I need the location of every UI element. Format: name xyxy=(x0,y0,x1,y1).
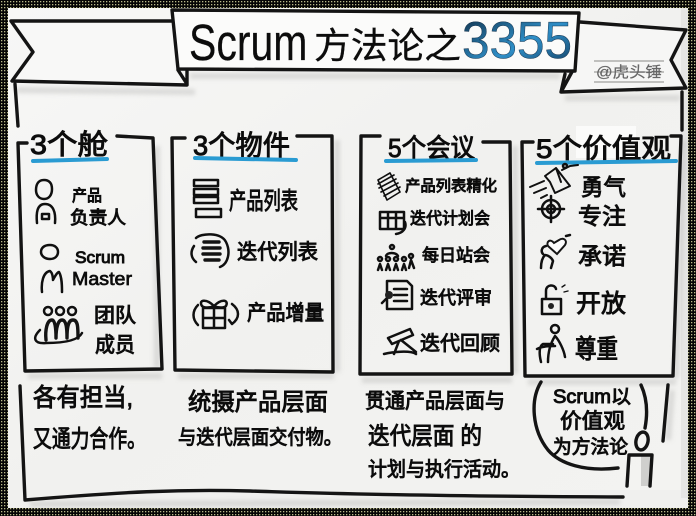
caption: roles: 又通力合作。 xyxy=(33,426,146,453)
event: sprint review: 迭代评审 xyxy=(420,288,492,308)
artifact: product backlog: 产品列表 xyxy=(229,188,298,215)
caption: artifacts: 统摄产品层面 xyxy=(188,389,328,416)
heading: 3个物件 xyxy=(193,130,290,161)
caption: artifacts xyxy=(178,389,342,449)
role: scrum master: Master xyxy=(72,269,132,289)
event: sprint review xyxy=(382,281,492,309)
event: backlog refinement: 产品列表精化 xyxy=(405,177,497,195)
value: openness: 开放 xyxy=(576,290,626,318)
heading: 5个价值观 xyxy=(536,134,671,164)
panel: 3 roles xyxy=(18,129,162,371)
heading: 5个会议 xyxy=(388,133,475,163)
value: commitment xyxy=(541,235,626,269)
event: daily scrum: 每日站会 xyxy=(422,246,490,265)
bottom frame xyxy=(20,385,668,500)
heading: 3个舱 xyxy=(30,129,108,160)
title number: 3355 xyxy=(462,12,572,70)
artifact: sprint backlog xyxy=(192,234,318,267)
callout: Scrum values speech bubble xyxy=(534,382,652,486)
role: product owner: 负责人 xyxy=(70,208,126,228)
event: sprint planning: 迭代计划会 xyxy=(410,209,490,228)
title banner: 方法论之 xyxy=(314,25,461,66)
caption: events: 迭代层面 的 xyxy=(368,423,482,450)
icon: speaker xyxy=(627,431,652,486)
side rules xyxy=(15,84,682,130)
callout: Scrum values speech bubble: 为方法论 xyxy=(553,436,628,458)
value: commitment: 承诺 xyxy=(578,243,626,269)
caption: roles: 各有担当, xyxy=(33,384,133,412)
right ribbon xyxy=(561,22,686,92)
value: openness xyxy=(542,285,626,318)
value: courage xyxy=(530,164,626,200)
artifact: product backlog xyxy=(194,180,298,217)
value: focus xyxy=(538,196,626,229)
event: retrospective: 迭代回顾 xyxy=(420,332,500,355)
event: backlog refinement xyxy=(378,173,497,200)
callout: Scrum values speech bubble: Scrum以 xyxy=(553,387,631,408)
value: courage: 勇气 xyxy=(581,174,626,200)
role: team members xyxy=(35,304,136,357)
author tag: @虎头锤 xyxy=(596,64,662,81)
callout: Scrum values speech bubble: 价值观 xyxy=(560,410,625,433)
artifact: sprint backlog: 迭代列表 xyxy=(237,241,318,264)
caption: roles xyxy=(33,384,146,453)
caption: events: 贯通产品层面与 xyxy=(365,390,505,413)
artifact: increment: 产品增量 xyxy=(247,302,324,325)
caption: events: 计划与执行活动。 xyxy=(368,458,520,481)
value: focus: 专注 xyxy=(578,203,626,229)
event: retrospective xyxy=(384,329,500,355)
role: team members: 成员 xyxy=(95,334,135,357)
panel: 5 values xyxy=(522,126,681,376)
artifact: increment xyxy=(194,301,324,328)
panel: 3 artifacts xyxy=(172,130,333,372)
title text: Scrum xyxy=(189,14,307,71)
title banner xyxy=(172,10,579,71)
role: scrum master: Scrum xyxy=(75,248,125,267)
role: team members: 团队 xyxy=(94,304,136,327)
caption: events xyxy=(365,390,520,481)
role: product owner: 产品 xyxy=(72,187,102,205)
value: respect: 尊重 xyxy=(575,334,618,364)
panel: 5 events xyxy=(360,133,512,374)
event: daily scrum xyxy=(378,245,490,270)
left ribbon xyxy=(11,21,187,85)
value: respect xyxy=(537,325,618,364)
role: scrum master xyxy=(41,245,132,292)
role: product owner xyxy=(36,180,126,228)
caption: artifacts: 与迭代层面交付物。 xyxy=(178,426,342,449)
event: sprint planning xyxy=(380,209,490,234)
